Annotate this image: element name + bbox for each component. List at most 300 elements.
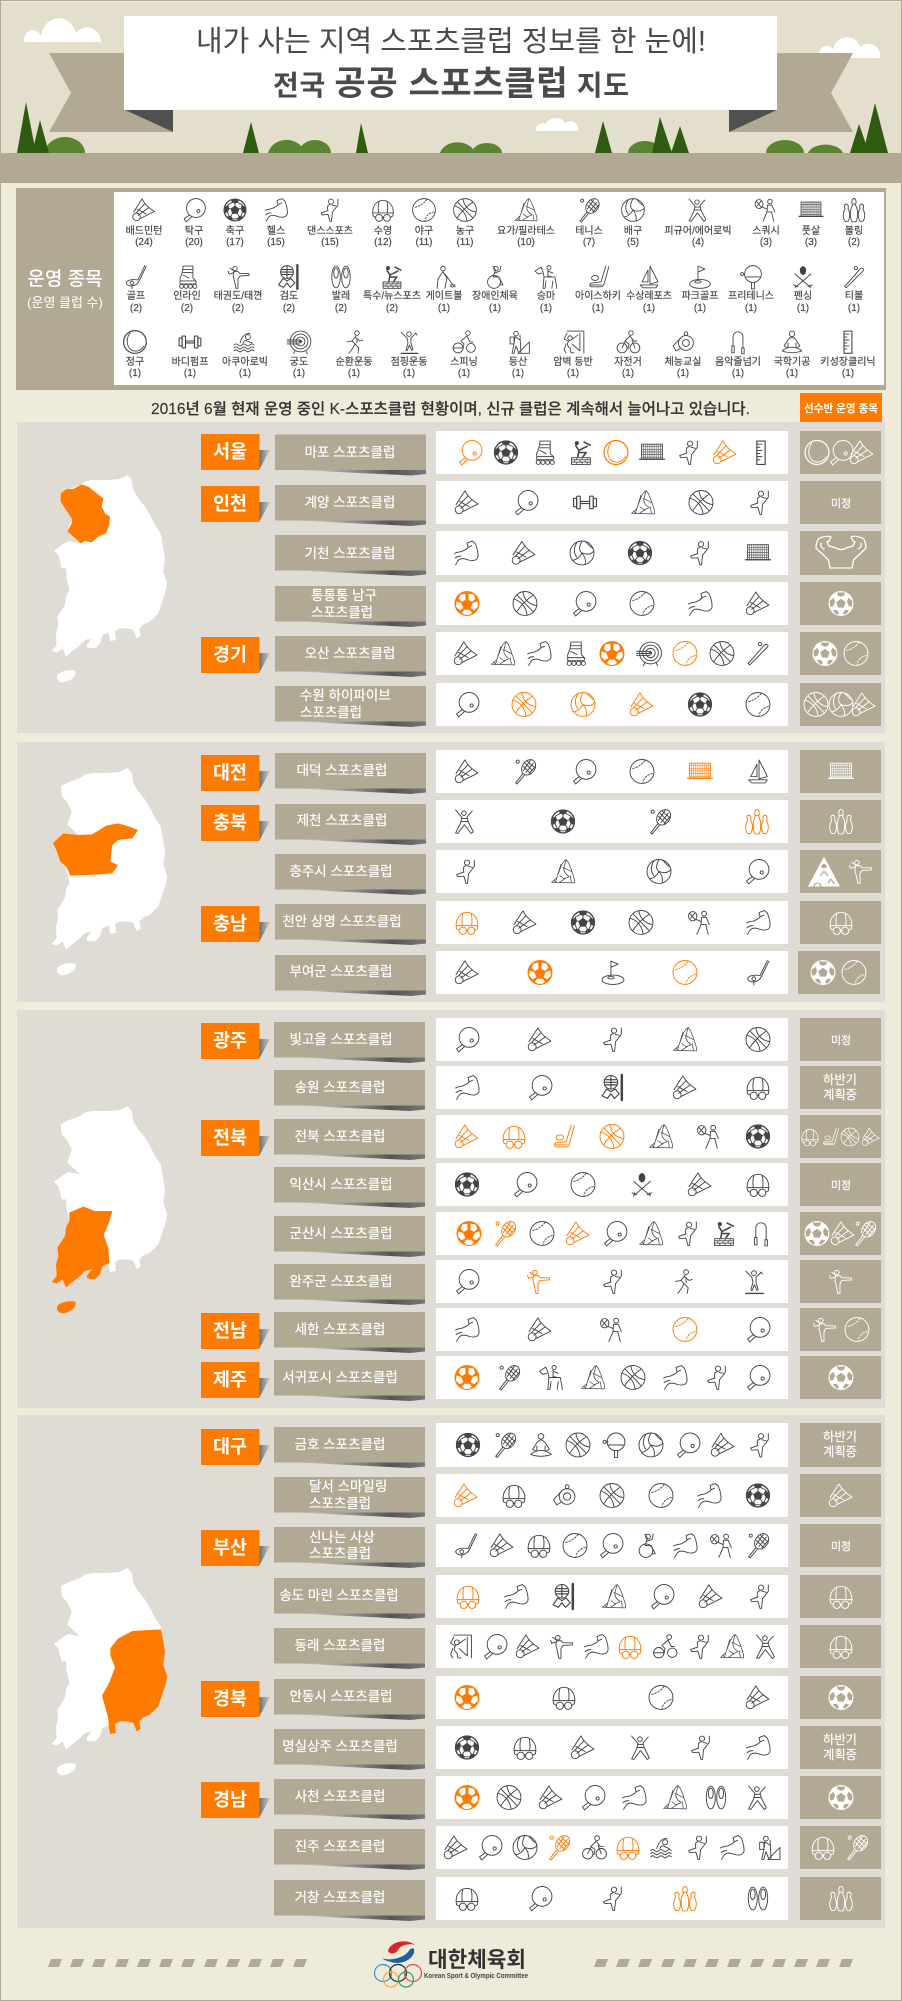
icon: paddle bbox=[530, 1076, 552, 1100]
icon: meditation bbox=[531, 1434, 551, 1456]
icon: paddle bbox=[601, 1534, 623, 1558]
legend: 점핑운동 bbox=[391, 332, 427, 379]
sports icons bbox=[436, 901, 788, 944]
icon: bowling bbox=[830, 810, 852, 834]
club name bbox=[274, 1829, 425, 1870]
legend: 탁구: 탁구 bbox=[185, 225, 203, 237]
legend: 헬스 bbox=[265, 199, 287, 248]
legend: 배드민턴 bbox=[126, 199, 162, 248]
icon: muscle bbox=[747, 911, 770, 934]
club name bbox=[275, 904, 426, 945]
icon: body muscle bbox=[816, 536, 866, 568]
legend: 스피닝: 스피닝 bbox=[450, 356, 478, 368]
icon: park golf bbox=[602, 961, 624, 984]
sports icons bbox=[436, 1018, 788, 1061]
cloud left bbox=[24, 18, 101, 42]
legend: 티볼 bbox=[845, 267, 864, 314]
icon: shuttlecock bbox=[444, 1836, 467, 1859]
legend: 발레: (2) bbox=[335, 303, 347, 314]
icon: shuttlecock bbox=[490, 1534, 513, 1557]
icon: shuttlecock bbox=[528, 1028, 551, 1051]
icon: dance bbox=[604, 1270, 621, 1293]
icon: dance bbox=[604, 1028, 621, 1051]
row: 익산시 스포츠클럽 bbox=[274, 1163, 881, 1208]
ribbon fold right bbox=[729, 110, 777, 132]
icon: extreme bbox=[715, 1222, 733, 1245]
legend: 음악줄넘기: (1) bbox=[732, 368, 744, 379]
elite class cell bbox=[800, 1676, 881, 1719]
legend: 요가/필라테스 bbox=[497, 199, 555, 248]
icon: baseball bbox=[673, 961, 697, 984]
icon: tennis bbox=[516, 757, 539, 784]
club name bbox=[274, 1360, 425, 1401]
legend: 헬스: (15) bbox=[267, 237, 285, 248]
legend: 아이스하키: 아이스하키 bbox=[575, 289, 621, 302]
club name bbox=[274, 1216, 425, 1257]
icon: yoga bbox=[650, 1125, 673, 1148]
icon: baseball bbox=[746, 693, 770, 716]
icon: soft tennis bbox=[805, 441, 829, 464]
legend: 키성장클리닉 bbox=[820, 331, 876, 379]
icon: paddle bbox=[480, 1836, 502, 1860]
icon: soccer bbox=[454, 1785, 479, 1810]
icon: paddle bbox=[457, 1270, 479, 1294]
elite class cell bbox=[800, 1115, 881, 1158]
icon: yoga bbox=[664, 1786, 687, 1809]
legend: 암벽 등반 bbox=[553, 331, 593, 379]
icon: basketball bbox=[804, 693, 828, 716]
row: 대덕 스포츠클럽 bbox=[275, 750, 881, 794]
club name: 군산시 스포츠클럽 bbox=[289, 1226, 393, 1241]
row: 군산시 스포츠클럽 bbox=[274, 1212, 881, 1257]
icon: squash bbox=[711, 1534, 731, 1557]
club name: 스포츠클럽 bbox=[311, 605, 373, 620]
footer stripes right bbox=[594, 1959, 853, 1967]
legend: 수상레포츠: 수상레포츠 bbox=[626, 290, 672, 302]
elite class cell bbox=[800, 850, 881, 893]
icon: squash bbox=[689, 911, 709, 934]
elite class cell bbox=[800, 750, 881, 793]
tag: 충남: 충남 bbox=[213, 913, 247, 934]
tag: 제주 bbox=[201, 1362, 270, 1398]
icon: muscle bbox=[585, 1635, 608, 1658]
icon: shuttlecock bbox=[850, 441, 873, 464]
legend: 등산: (1) bbox=[512, 368, 524, 379]
icon: tennis bbox=[496, 1219, 519, 1246]
tag: 인천: 인천 bbox=[213, 493, 247, 514]
sports icons bbox=[436, 1524, 788, 1567]
elite class cell bbox=[798, 951, 880, 994]
elite class cell bbox=[800, 632, 881, 675]
icon: fencing bbox=[632, 1173, 652, 1196]
icon: spinning bbox=[654, 1635, 677, 1658]
legend: 파크골프 bbox=[682, 266, 718, 314]
icon: hockey bbox=[554, 1125, 574, 1147]
icon: shuttlecock bbox=[852, 693, 875, 716]
legend: 수영: 수영 bbox=[374, 225, 392, 237]
panel: 영남 section bbox=[17, 1415, 885, 1928]
elite class cell: 계획중 bbox=[823, 1088, 857, 1102]
club name bbox=[274, 1022, 425, 1063]
icon: volleyball bbox=[571, 693, 595, 716]
icon: baseball bbox=[649, 1484, 673, 1507]
legend: 점핑운동: (1) bbox=[403, 368, 415, 379]
icon: tennis bbox=[500, 1363, 523, 1390]
bushes bbox=[45, 137, 843, 153]
sports icons bbox=[436, 582, 788, 625]
legend: 장애인체육 bbox=[472, 266, 518, 314]
legend: 골프 bbox=[126, 266, 146, 314]
tag: 광주 bbox=[201, 1023, 270, 1059]
icon: muscle bbox=[623, 1786, 646, 1809]
icon: baseball bbox=[673, 1318, 697, 1341]
club name bbox=[275, 804, 426, 845]
legend: 바디펌프 bbox=[172, 336, 208, 379]
sports icons bbox=[436, 1575, 788, 1618]
club name: 스포츠클럽 bbox=[300, 705, 362, 720]
panel: 호남 section bbox=[17, 1010, 885, 1408]
sports icons bbox=[436, 1826, 788, 1869]
sports icons bbox=[436, 1423, 788, 1467]
icon: squash bbox=[698, 1125, 718, 1148]
club name: 진주 스포츠클럽 bbox=[295, 1839, 385, 1854]
icon: jump rope bbox=[755, 1223, 767, 1246]
sports icons bbox=[436, 800, 788, 843]
sports icons bbox=[436, 531, 788, 575]
legend: 체능교실: 체능교실 bbox=[665, 356, 701, 368]
icon: tennis bbox=[749, 1531, 772, 1558]
cloud right bbox=[819, 37, 880, 58]
icon: whistle bbox=[554, 1485, 575, 1505]
icon: soccer bbox=[457, 1434, 479, 1456]
club name bbox=[274, 1679, 425, 1720]
icon: sailboat bbox=[749, 760, 767, 783]
tag: 경기: 경기 bbox=[213, 644, 247, 665]
sports icons bbox=[436, 1066, 788, 1109]
legend: 축구: 축구 bbox=[226, 225, 244, 237]
legend: 발레 bbox=[332, 266, 350, 314]
club name bbox=[275, 854, 426, 895]
icon: soccer bbox=[456, 1173, 478, 1196]
icon: soccer bbox=[812, 641, 837, 666]
club name: 부여군 스포츠클럽 bbox=[289, 964, 393, 979]
icon: shuttlecock bbox=[711, 1433, 734, 1456]
row: 전북 스포츠클럽 bbox=[274, 1115, 881, 1160]
icon: baseball bbox=[649, 1686, 673, 1709]
club name bbox=[274, 1477, 425, 1518]
icon: basketball bbox=[600, 1125, 624, 1148]
club name: 완주군 스포츠클럽 bbox=[289, 1274, 393, 1289]
icon: basketball bbox=[512, 693, 536, 716]
icon: shuttlecock bbox=[455, 760, 478, 783]
icon: extreme bbox=[572, 441, 590, 464]
icon: golf bbox=[748, 961, 769, 985]
icon: basketball bbox=[689, 491, 713, 514]
icon: yoga bbox=[674, 1028, 697, 1051]
legend: 자전거: (1) bbox=[622, 368, 634, 379]
icon: taekwondo bbox=[830, 1270, 851, 1293]
icon: tennis bbox=[856, 1219, 879, 1246]
tag: 경남 bbox=[201, 1782, 270, 1818]
icon: muscle bbox=[721, 1836, 744, 1859]
icon: kendo bbox=[553, 1584, 573, 1609]
legend: 배구 bbox=[622, 199, 644, 248]
header illustration bbox=[1, 2, 901, 183]
icon: swim bbox=[528, 1535, 550, 1557]
icon: goal bbox=[640, 444, 664, 459]
club name bbox=[274, 1578, 425, 1619]
tag: 전남 bbox=[201, 1313, 270, 1349]
icon: climbing bbox=[451, 1635, 471, 1658]
club name bbox=[274, 1880, 425, 1921]
icon: shuttlecock bbox=[513, 911, 536, 934]
elite class cell bbox=[800, 1726, 881, 1769]
elite class cell bbox=[800, 683, 881, 726]
icon: basketball bbox=[600, 1484, 624, 1507]
panel: 충청 section bbox=[17, 742, 885, 1002]
icon: volleyball bbox=[647, 860, 671, 883]
sports icons bbox=[436, 951, 788, 994]
icon: muscle bbox=[698, 1484, 721, 1507]
icon: muscle bbox=[747, 1736, 770, 1759]
elite class cell bbox=[800, 901, 881, 944]
sports icons bbox=[436, 683, 788, 726]
legend: 장애인체육: (1) bbox=[489, 303, 501, 314]
legend: 수영 bbox=[373, 200, 393, 248]
tag: 경북: 경북 bbox=[213, 1688, 247, 1709]
sports icons bbox=[436, 1308, 788, 1351]
club name: 통통통 남구 bbox=[311, 588, 377, 603]
tag: 대전: 대전 bbox=[213, 762, 247, 783]
legend: 티볼: (1) bbox=[848, 303, 860, 314]
legend: 펜싱 bbox=[794, 266, 812, 314]
icon: baseball bbox=[673, 642, 697, 665]
club name: 제천 스포츠클럽 bbox=[297, 813, 387, 828]
legend: 스쿼시: 스쿼시 bbox=[752, 225, 780, 237]
elite class cell bbox=[800, 1163, 881, 1206]
club name bbox=[275, 955, 426, 996]
elite class cell bbox=[800, 1474, 881, 1517]
icon: muscle bbox=[689, 592, 712, 615]
status note: 2016년 6월 현재 운영 중인 K-스포츠클럽 현황이며, 신규 클럽은 계속해서 늘어나고 있습니다. bbox=[151, 400, 750, 418]
sports icons bbox=[436, 1877, 788, 1920]
icon: t-ball bbox=[748, 642, 768, 665]
icon: inline bbox=[536, 441, 554, 464]
icon: shuttlecock bbox=[516, 1635, 539, 1658]
icon: dance bbox=[689, 1836, 706, 1859]
icon: yoga bbox=[632, 491, 655, 514]
row: 기천 스포츠클럽 bbox=[275, 531, 881, 576]
legend: 키성장클리닉: 키성장클리닉 bbox=[820, 356, 876, 368]
icon: muscle bbox=[664, 1366, 687, 1389]
icon: dance bbox=[751, 491, 768, 514]
icon: baseball bbox=[842, 961, 866, 984]
elite class cell bbox=[800, 1877, 881, 1920]
icon: shuttlecock bbox=[455, 961, 478, 984]
club name bbox=[275, 686, 426, 727]
club name: 전북 스포츠클럽 bbox=[295, 1129, 385, 1144]
legend: 헬스: 헬스 bbox=[267, 225, 285, 237]
tag: 경기 bbox=[201, 637, 270, 673]
legend: 티볼: 티볼 bbox=[845, 290, 863, 302]
icon: shuttlecock bbox=[862, 1128, 879, 1145]
club name: 천안 상명 스포츠클럽 bbox=[282, 914, 402, 929]
elite class cell bbox=[800, 1212, 881, 1255]
legend: 프리테니스: 프리테니스 bbox=[728, 290, 774, 302]
legend: 검도: (2) bbox=[283, 303, 295, 314]
sports icons bbox=[436, 1163, 788, 1206]
olympic rings bbox=[374, 1964, 422, 1987]
icon: soccer bbox=[810, 960, 835, 985]
tag: 서울: 서울 bbox=[213, 441, 247, 462]
legend: 배드민턴: (24) bbox=[135, 237, 153, 248]
icon: shuttlecock bbox=[746, 592, 769, 615]
ribbon tail left bbox=[49, 53, 173, 132]
legend: 아쿠아로빅: 아쿠아로빅 bbox=[222, 356, 268, 368]
row: 부여군 스포츠클럽 bbox=[275, 951, 880, 996]
icon: swim bbox=[456, 912, 478, 934]
icon: taekwondo bbox=[551, 1635, 572, 1658]
legend: 탁구 bbox=[184, 199, 205, 248]
club name: 송도 마린 스포츠클럽 bbox=[279, 1588, 399, 1603]
legend: 장애인체육: 장애인체육 bbox=[472, 290, 518, 302]
legend: 검도: 검도 bbox=[280, 290, 298, 302]
legend: 국학기공: 국학기공 bbox=[774, 356, 810, 368]
legend: 아이스하키 bbox=[575, 266, 621, 314]
row: 진주 스포츠클럽 bbox=[274, 1826, 881, 1870]
legend: 암벽 등반: (1) bbox=[567, 368, 579, 379]
sports icons bbox=[436, 1474, 788, 1517]
tag: 서울 bbox=[201, 434, 270, 470]
icon: baseball bbox=[563, 1534, 587, 1557]
icon: shuttlecock bbox=[746, 1686, 769, 1709]
legend: 펜싱: 펜싱 bbox=[794, 290, 812, 302]
legend: 풋살: 풋살 bbox=[802, 225, 820, 237]
sports icons bbox=[436, 431, 788, 474]
legend: 파크골프: 파크골프 bbox=[682, 290, 718, 302]
icon: archery bbox=[636, 642, 661, 666]
icon: shuttlecock bbox=[512, 541, 535, 564]
row: 안동시 스포츠클럽 bbox=[274, 1676, 881, 1720]
club name: 마포 스포츠클럽 bbox=[305, 445, 395, 460]
row: 서귀포시 스포츠클럽 bbox=[274, 1356, 881, 1401]
legend: 승마 bbox=[535, 266, 557, 314]
legend: 농구 bbox=[454, 199, 476, 248]
legend: 파크골프: (1) bbox=[694, 303, 706, 314]
row: 신나는 사상 스포츠클럽 bbox=[274, 1524, 881, 1568]
club name bbox=[274, 1427, 425, 1468]
icon: soccer bbox=[804, 1221, 829, 1246]
row: 거창 스포츠클럽 bbox=[274, 1877, 881, 1921]
elite class cell: 하반기 bbox=[823, 1733, 857, 1747]
tag: 부산 bbox=[201, 1530, 270, 1566]
icon: tennis bbox=[496, 1430, 519, 1457]
legend: 탁구: (20) bbox=[185, 237, 203, 248]
legend: 정구: 정구 bbox=[126, 356, 144, 368]
icon: baseball bbox=[630, 592, 654, 615]
icon: muscle bbox=[456, 1076, 479, 1099]
elite class cell: 미정 bbox=[831, 1034, 851, 1047]
tag: 인천 bbox=[201, 486, 270, 522]
club name bbox=[274, 1628, 425, 1669]
elite class cell bbox=[800, 481, 881, 524]
row: 금호 스포츠클럽 bbox=[274, 1423, 881, 1468]
legend: 특수/뉴스포츠 bbox=[363, 266, 421, 314]
legend: 등산 bbox=[509, 331, 529, 379]
icon: swim bbox=[617, 1837, 639, 1859]
club name bbox=[274, 1119, 425, 1160]
row: 통통통 남구 스포츠클럽 bbox=[275, 582, 881, 627]
club name: 거창 스포츠클럽 bbox=[295, 1890, 385, 1905]
club name: 기천 스포츠클럽 bbox=[305, 546, 395, 561]
sports icons bbox=[436, 1115, 788, 1158]
club name: 수원 하이파이브 bbox=[300, 688, 391, 703]
club name: 스포츠클럽 bbox=[309, 1546, 371, 1561]
legend: 아이스하키: (1) bbox=[592, 303, 604, 314]
club name bbox=[275, 753, 426, 794]
legend: 특수/뉴스포츠: (2) bbox=[386, 303, 398, 314]
icon: soccer bbox=[454, 1685, 479, 1710]
elite class cell bbox=[800, 431, 881, 474]
icon: soccer bbox=[528, 960, 552, 985]
icon: goal bbox=[828, 763, 853, 778]
legend: 태권도/태껸 bbox=[214, 266, 262, 314]
icon: swim bbox=[830, 912, 852, 934]
icon: muscle bbox=[455, 541, 478, 565]
sports icons bbox=[436, 1625, 788, 1668]
organization name: 대한체육회 bbox=[428, 1948, 526, 1972]
icon: muscle bbox=[528, 642, 551, 665]
icon: goal bbox=[688, 763, 712, 778]
icon: yoga bbox=[640, 1222, 663, 1245]
elite class cell bbox=[800, 1625, 881, 1668]
row: 세한 스포츠클럽 bbox=[274, 1308, 881, 1353]
legend: 야구 bbox=[413, 199, 435, 248]
club name: 동래 스포츠클럽 bbox=[295, 1638, 385, 1653]
icon: paddle bbox=[516, 491, 538, 515]
icon: volleyball bbox=[570, 541, 594, 565]
icon: muscle bbox=[456, 1318, 479, 1341]
tag: 전남: 전남 bbox=[213, 1320, 247, 1341]
tag: 대구 bbox=[201, 1429, 270, 1465]
legend: 수상레포츠: (1) bbox=[643, 303, 655, 314]
icon: paddle bbox=[574, 760, 596, 784]
legend: 수영: (12) bbox=[374, 237, 392, 248]
club name bbox=[275, 434, 426, 476]
legend: 순환운동: 순환운동 bbox=[336, 356, 372, 368]
elite class cell: 미정 bbox=[831, 1179, 851, 1192]
legend: 테니스 bbox=[575, 196, 603, 248]
icon: soccer bbox=[828, 591, 853, 616]
elite class cell bbox=[800, 1575, 881, 1618]
legend: 축구: (17) bbox=[226, 237, 244, 248]
icon: shuttlecock bbox=[571, 1736, 594, 1759]
icon: shuttlecock bbox=[829, 1484, 852, 1507]
trees bbox=[17, 102, 888, 153]
icon: tennis bbox=[550, 1833, 573, 1860]
icon: paddle bbox=[530, 1887, 552, 1911]
legend: 국학기공 bbox=[774, 331, 810, 379]
elite class cell bbox=[800, 531, 881, 575]
icon: muscle bbox=[505, 1585, 528, 1608]
icon: soccer bbox=[689, 693, 711, 716]
legend: 댄스스포츠 bbox=[307, 199, 353, 248]
icon: basketball bbox=[497, 1786, 521, 1809]
elite class cell bbox=[800, 800, 881, 843]
icon: swim bbox=[553, 1687, 575, 1709]
icon: soccer bbox=[572, 911, 594, 934]
legend: 자전거: 자전거 bbox=[614, 356, 642, 368]
